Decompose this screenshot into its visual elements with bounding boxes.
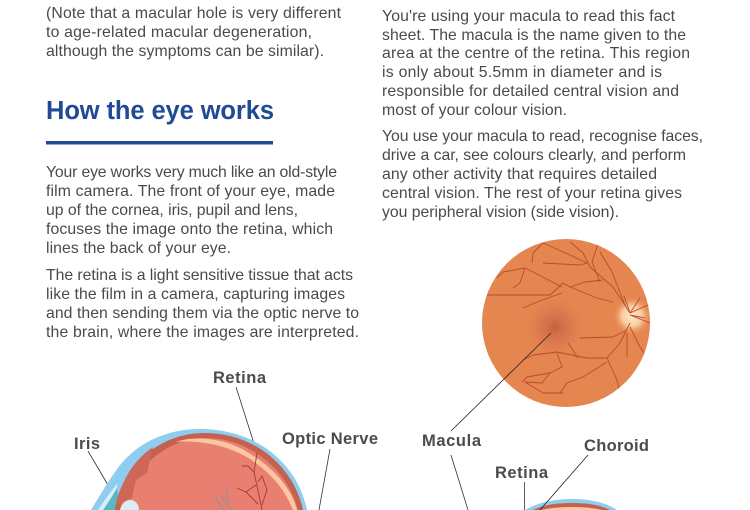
label: Retina (left diagram): Retina (213, 369, 267, 387)
text block: how the eye works paragraph 2: The retina is a light sensitive tissue that acts (46, 267, 353, 284)
text block: macula description paragraph 1: You're using your macula to read this fact (382, 8, 676, 25)
label: Iris: Iris (74, 435, 100, 453)
text block: macula description paragraph 2: central vision. The rest of your retina gives (382, 185, 682, 202)
text block: how the eye works paragraph 2: like the film in a camera, capturing images (46, 286, 345, 303)
text block: macula description paragraph 2 (382, 128, 703, 221)
text block: how the eye works paragraph 1: lines the back of your eye. (46, 240, 231, 257)
text block: macular hole note: although the symptoms can be similar). (46, 43, 324, 60)
label: Optic Nerve (282, 430, 378, 510)
text block: macula description paragraph 1: is only about 5.5mm in diameter and is (382, 64, 662, 81)
text block: macular hole note: to age-related macular degeneration, (46, 24, 312, 41)
text block: how the eye works paragraph 1: up of the cornea, iris, pupil and lens, (46, 202, 298, 219)
label: Retina (right diagram) (495, 464, 549, 510)
text block: how the eye works paragraph 1: Your eye works very much like an old-style (46, 164, 337, 181)
text block: macular hole note (46, 5, 342, 60)
text block: macula description paragraph 1 (382, 8, 690, 119)
text block: how the eye works paragraph 2: and then sending them via the optic nerve to (46, 305, 359, 322)
illustration: eye cross-section (right) (525, 499, 617, 510)
blood vessels (237, 453, 267, 510)
heading: How the eye works: How the eye works (46, 97, 274, 125)
text block: how the eye works paragraph 1 (46, 164, 337, 257)
label: Macula (422, 333, 551, 510)
text block: how the eye works paragraph 1: film camera. The front of your eye, made (46, 183, 335, 200)
label: Iris (74, 435, 115, 497)
label: Retina (left diagram) (213, 369, 267, 453)
text block: macula description paragraph 1: area at the centre of the retina. This region (382, 45, 690, 62)
label: Choroid (540, 437, 649, 510)
illustration: eye cross-section (left) (91, 429, 307, 510)
heading: How the eye works (46, 97, 274, 144)
illustration: retina fundus (482, 239, 652, 407)
text block: macula description paragraph 2: any other activity that requires detailed (382, 166, 657, 183)
text block: how the eye works paragraph 2 (46, 267, 359, 341)
label: Macula: Macula (422, 432, 482, 450)
label: Retina (right diagram): Retina (495, 464, 549, 482)
label: Optic Nerve: Optic Nerve (282, 430, 378, 448)
text block: macular hole note: (Note that a macular hole is very different (46, 5, 342, 22)
text block: macula description paragraph 2: drive a car, see colours clearly, and perform (382, 147, 686, 164)
label: Choroid: Choroid (584, 437, 649, 455)
text block: how the eye works paragraph 2: the brain, where the images are interpreted. (46, 324, 359, 341)
text block: macula description paragraph 1: most of your colour vision. (382, 102, 567, 119)
text block: macula description paragraph 2: You use your macula to read, recognise faces, (382, 128, 703, 145)
text block: macula description paragraph 2: you peripheral vision (side vision). (382, 204, 619, 221)
text block: macula description paragraph 1: sheet. The macula is the name given to the (382, 27, 686, 44)
text block: how the eye works paragraph 1: focuses the image onto the retina, which (46, 221, 333, 238)
text block: macula description paragraph 1: responsible for detailed central vision and (382, 83, 679, 100)
